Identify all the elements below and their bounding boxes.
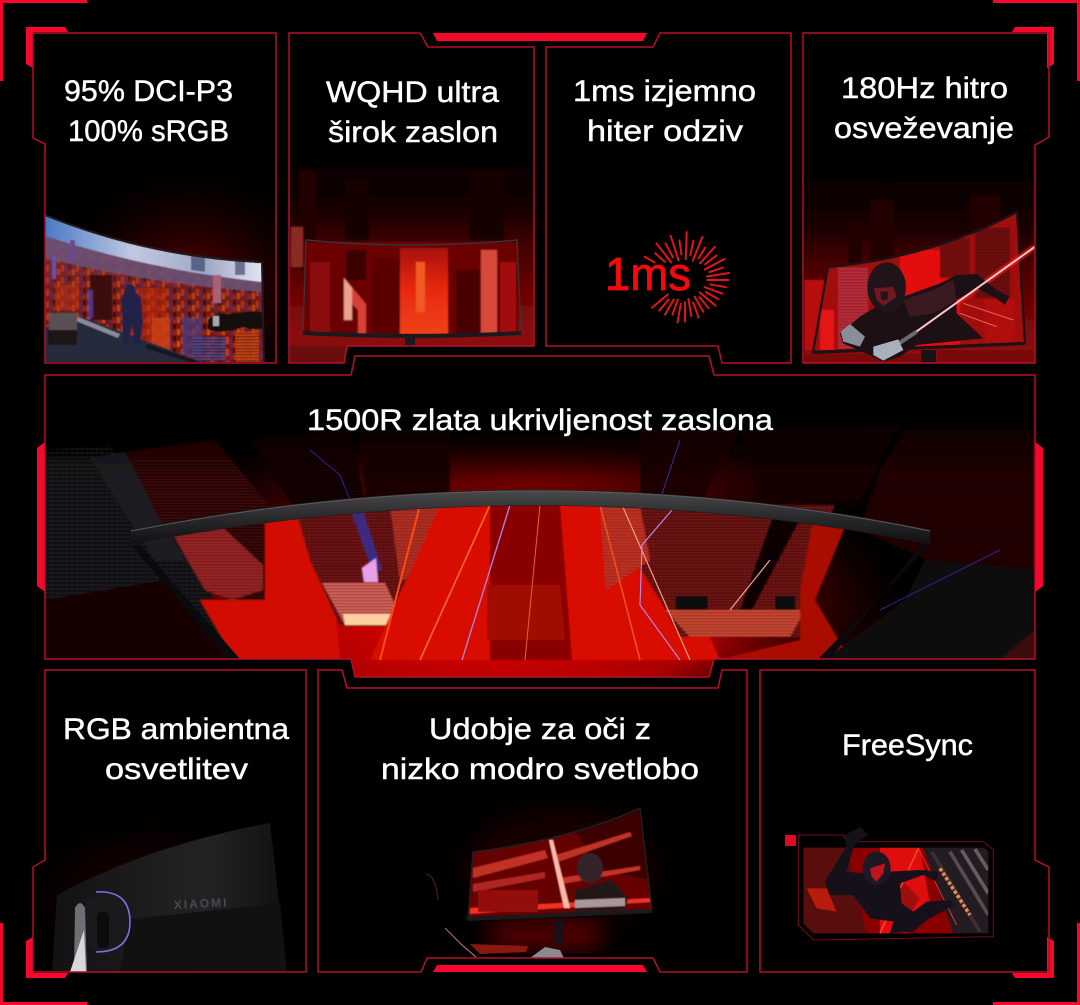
panel: response time [546, 33, 791, 363]
panel: refresh rate [803, 33, 1049, 363]
panel frame [45, 356, 1035, 677]
panel frame [289, 33, 534, 363]
panel: curvature [44, 355, 1036, 678]
heading: osveževanje [834, 112, 1014, 145]
panel: eye comfort [318, 670, 747, 972]
heading: osvetlitev [105, 753, 248, 786]
image: ninja leaping out of monitor [804, 165, 1035, 363]
heading [381, 713, 699, 786]
heading: 1ms izjemno [573, 75, 756, 108]
heading [326, 76, 499, 149]
panel frame [33, 670, 306, 972]
heading: nizko modro svetlobo [381, 753, 699, 786]
panel frame [803, 33, 1049, 363]
heading: hiter odziv [587, 115, 743, 148]
image: game screen card with ninja [785, 827, 993, 940]
panel frame [760, 670, 1049, 972]
image: gamer facing monitor [426, 805, 655, 958]
image: city seen from above with curved monitor [46, 425, 1034, 676]
heading: 100% sRGB [68, 115, 229, 148]
heading: Udobje za oči z [429, 713, 651, 746]
heading [64, 75, 233, 148]
heading: WQHD ultra [326, 76, 499, 109]
heading [834, 72, 1014, 145]
panel frame [318, 670, 747, 972]
image: red city in monitor [289, 150, 535, 363]
panel: WQHD ultrawide [289, 33, 535, 363]
heading: 95% DCI-P3 [64, 75, 233, 108]
panel frame [546, 33, 791, 363]
image: curved monitor with city skyline [46, 192, 276, 362]
heading: 180Hz hitro [841, 72, 1008, 105]
heading [573, 75, 756, 148]
icon: 1ms sunburst [605, 232, 729, 323]
heading: FreeSync [842, 729, 973, 762]
image: monitor rear with lit ring [15, 815, 287, 985]
panel: RGB ambient light [15, 670, 306, 985]
heading: RGB ambientna [63, 713, 289, 746]
panel frame [33, 33, 276, 363]
heading: 1500R zlata ukrivljenost zaslona [307, 404, 773, 437]
icon: small badge [785, 835, 796, 846]
label: brand on monitor back: XIAOMI [173, 895, 229, 912]
heading: širok zaslon [328, 116, 498, 149]
icon: 1ms sunburst: 1ms [605, 248, 691, 300]
heading [63, 713, 289, 786]
panel: FreeSync [760, 670, 1049, 972]
panel: colour gamut [32, 32, 277, 364]
